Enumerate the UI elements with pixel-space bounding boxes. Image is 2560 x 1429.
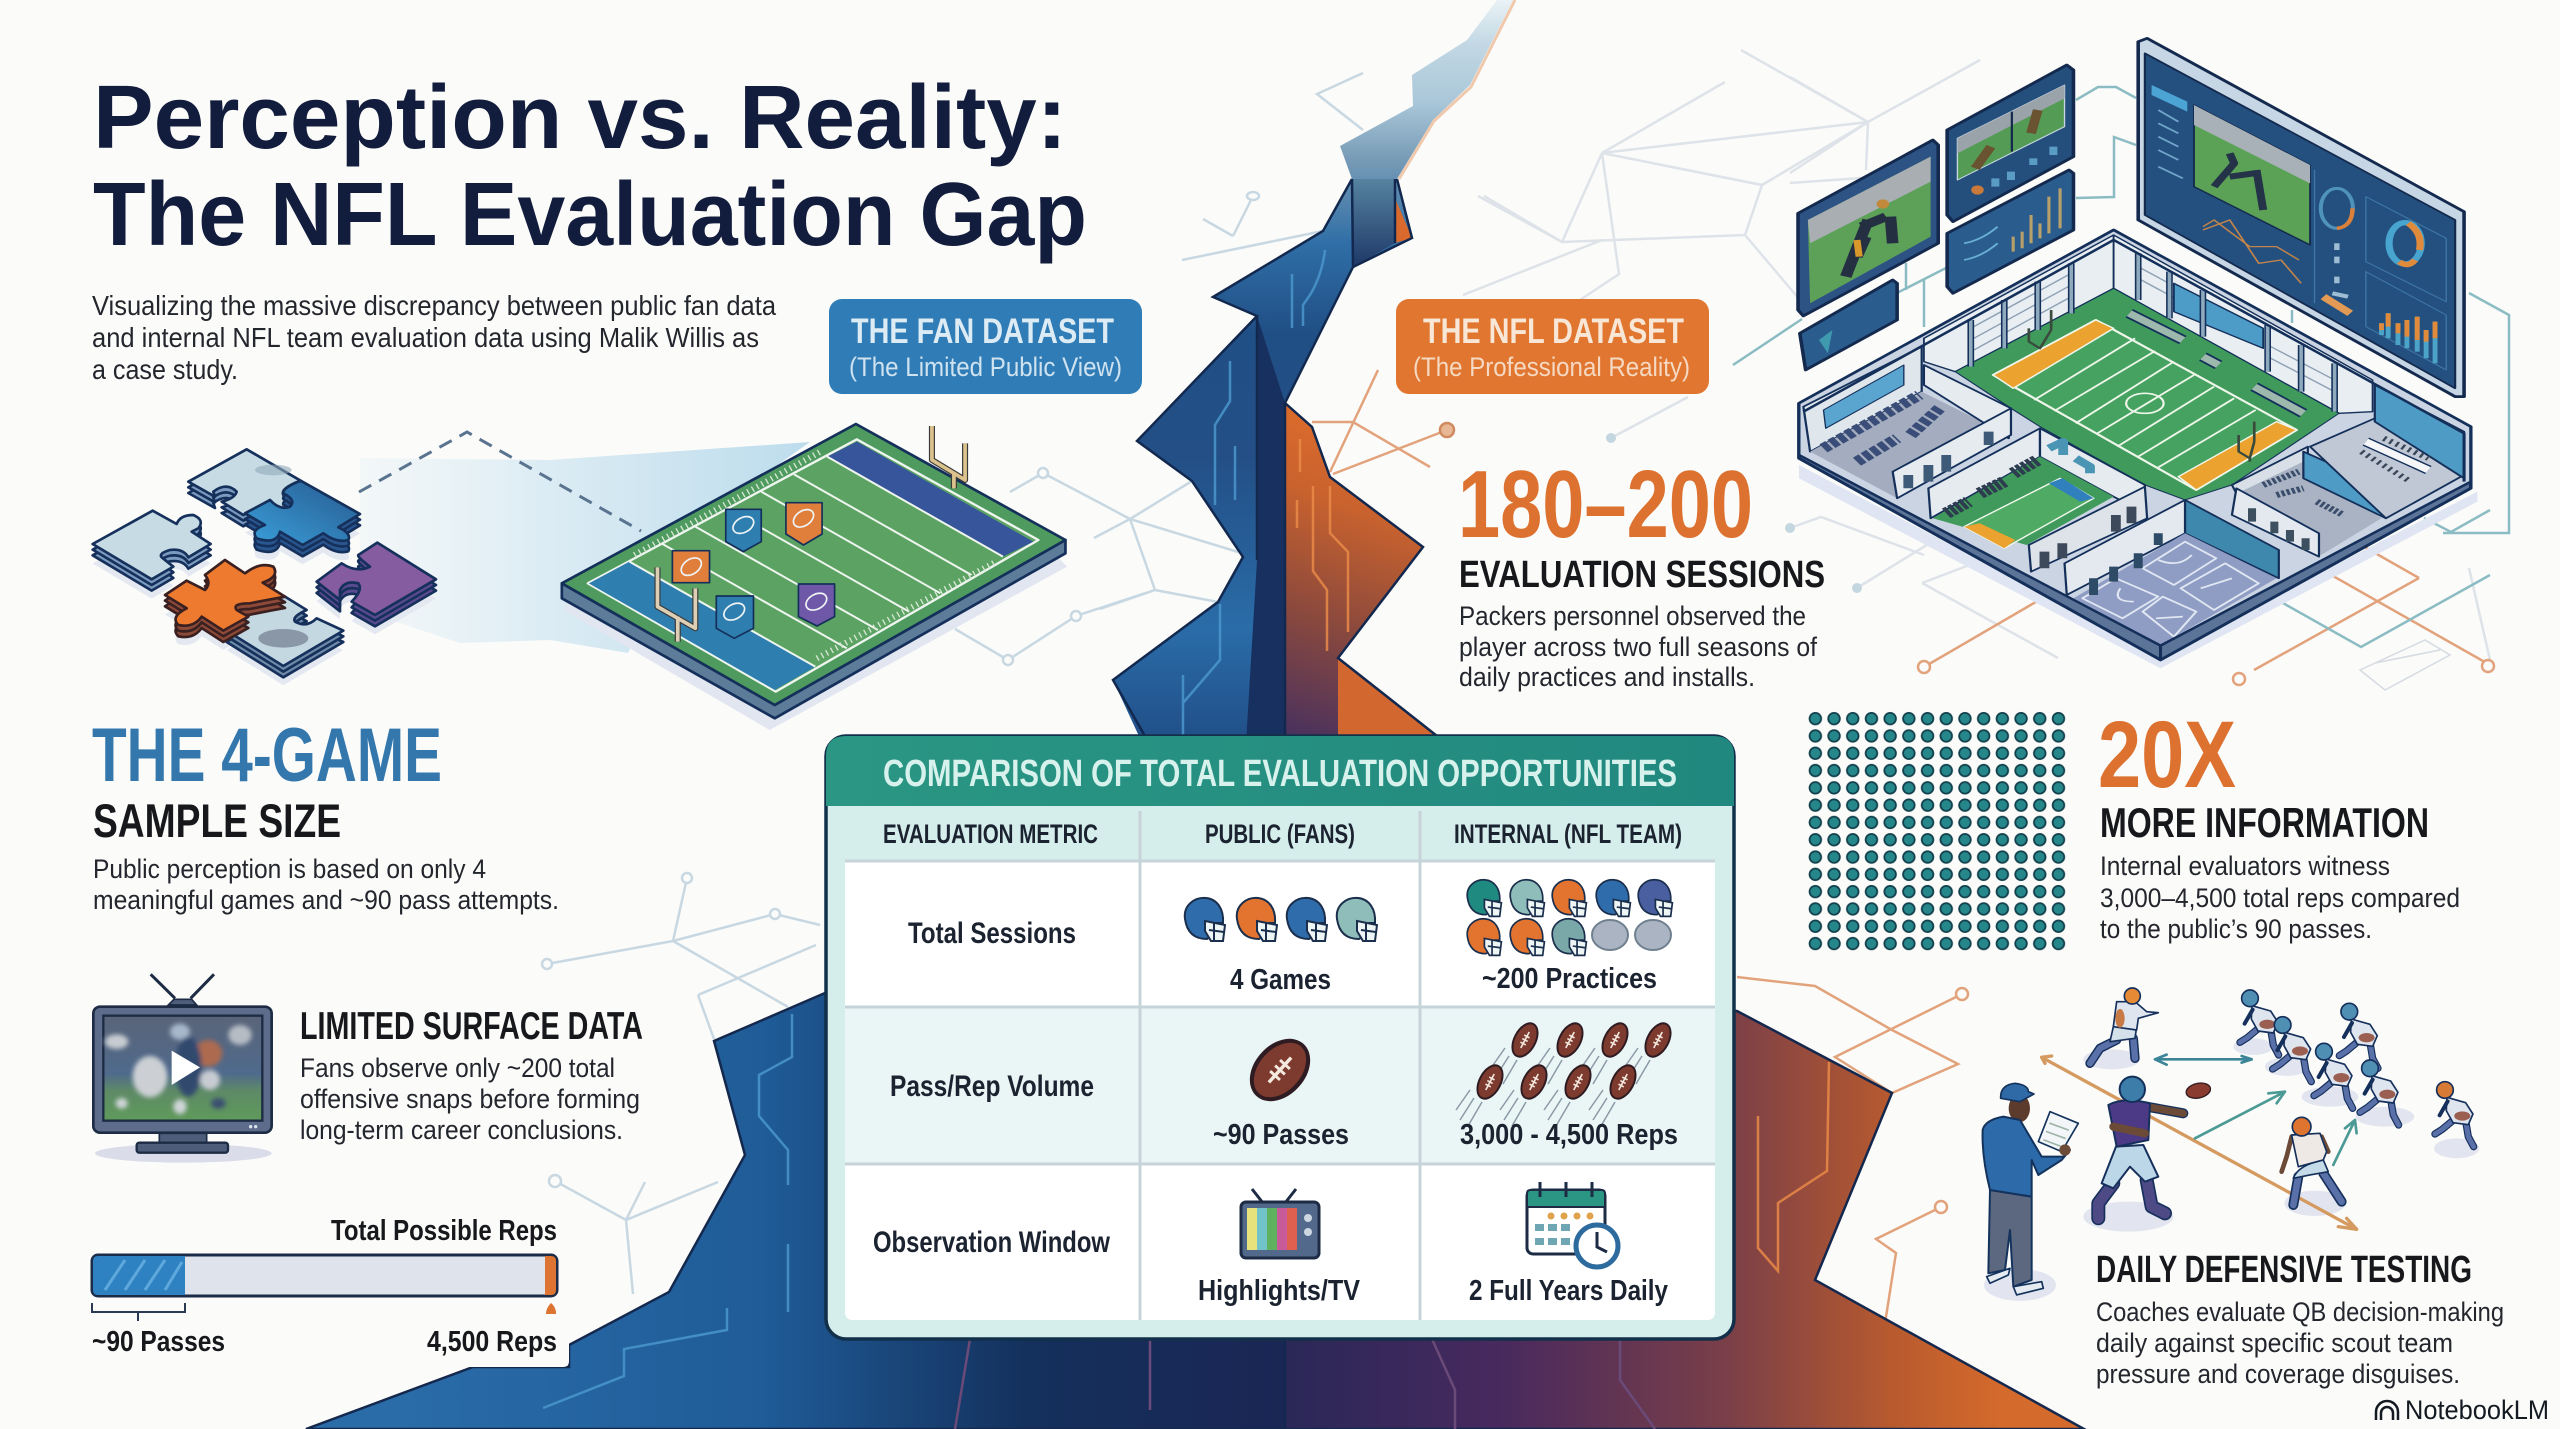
row label: observation window: Observation Window xyxy=(873,1226,1111,1259)
table column headers: INTERNAL (NFL TEAM) xyxy=(1454,819,1682,849)
marker: purple xyxy=(798,584,835,626)
fissure: orange professional side top xyxy=(1285,403,1460,780)
end zone: lower xyxy=(2178,422,2297,490)
wall screens xyxy=(2174,283,2263,348)
stat: 20x more information: 20X xyxy=(2098,702,2236,808)
end zone: navy xyxy=(827,442,1033,557)
subtitle: a case study. xyxy=(92,354,238,385)
fissure: pale orange top edge xyxy=(1399,0,1515,179)
screen: panels xyxy=(2315,170,2446,370)
screen: line chart xyxy=(2203,220,2301,283)
network lines: right grey, teal and orange xyxy=(1312,50,2509,1415)
football in flight xyxy=(2185,1081,2212,1100)
illustration: small field with markers xyxy=(562,424,1067,730)
text: limited surface data: long-term career conclusions. xyxy=(300,1115,623,1145)
stat: 180-200 evaluation sessions: daily practices and installs. xyxy=(1459,662,1755,692)
light beam from puzzle to field xyxy=(360,442,810,653)
text: limited surface data: Fans observe only ~200 total xyxy=(300,1053,615,1083)
icon: scattered puzzle pieces xyxy=(93,449,436,685)
midfield logo xyxy=(2126,393,2164,413)
badge: the fan dataset xyxy=(829,299,1142,394)
screen: button xyxy=(2323,297,2350,313)
player: far right xyxy=(2435,1082,2474,1147)
illustration: isometric facility cutaway xyxy=(1799,230,2477,668)
stat: 20x more information xyxy=(2098,702,2460,944)
arrow: teal routes xyxy=(2195,1092,2357,1165)
stat: 180-200 evaluation sessions: Packers personnel observed the xyxy=(1459,601,1806,631)
title: Perception vs. Reality: xyxy=(93,68,1067,168)
facility shadow xyxy=(1799,465,2477,668)
fissure: orange professional side bottom xyxy=(1285,1000,2084,1429)
icon: ten helmets xyxy=(1467,880,1672,955)
table body rows xyxy=(845,811,1715,1320)
table title bar xyxy=(826,736,1734,806)
cell: reps: 3,000 - 4,500 Reps xyxy=(1460,1119,1678,1151)
icon: four helmets xyxy=(1185,898,1377,941)
fissure: orange lower wedge xyxy=(1338,658,1437,745)
screen: large analytics xyxy=(2138,38,2464,397)
arrow: orange route xyxy=(2042,1056,2357,1229)
cell: 200 practices: ~200 Practices xyxy=(1482,963,1657,995)
player: defender group xyxy=(2240,990,2399,1125)
badge: the fan dataset: (The Limited Public View) xyxy=(849,352,1122,382)
stat: 20x more information: 3,000–4,500 total reps compared xyxy=(2100,883,2460,913)
back wall: left xyxy=(1924,235,2114,372)
text: limited surface data: LIMITED SURFACE DATA xyxy=(300,1005,643,1048)
fissure: dark outlines xyxy=(1113,179,1437,745)
illustration: practice scene xyxy=(1983,988,2479,1301)
icon: calendar with clock xyxy=(1527,1182,1618,1267)
icon: eight footballs xyxy=(1456,1019,1676,1126)
player: lower receiver xyxy=(2282,1117,2342,1205)
icon: single football xyxy=(1241,1030,1319,1110)
text: limited surface data xyxy=(300,1005,643,1145)
end zone: upper xyxy=(1993,320,2114,388)
facility slab xyxy=(1799,230,2471,660)
indoor turf xyxy=(1955,288,2339,500)
person: coach with clipboard xyxy=(1983,1083,2078,1295)
facility floor xyxy=(1799,230,2471,646)
text: daily defensive testing xyxy=(2096,1249,2504,1389)
subtitle: and internal NFL team evaluation data using Malik Willis as xyxy=(92,322,759,353)
badge: the nfl dataset xyxy=(1396,299,1709,394)
text: daily defensive testing: Coaches evaluate QB decision-making xyxy=(2096,1297,2504,1327)
puzzle piece: orange xyxy=(165,560,285,642)
row label: pass/rep volume: Pass/Rep Volume xyxy=(890,1070,1094,1103)
chart: total possible reps bar: 4,500 Reps xyxy=(427,1326,557,1358)
screen: sidebar list xyxy=(2158,110,2183,178)
stat: the 4-game sample size: SAMPLE SIZE xyxy=(93,794,341,847)
player: receiver xyxy=(2090,988,2158,1063)
puzzle piece: pale left xyxy=(93,511,211,591)
back wall: right xyxy=(2114,235,2373,413)
fissure: small orange chip xyxy=(1395,198,1412,243)
screen: players xyxy=(2214,153,2263,210)
chart: total possible reps bar: ~90 Passes xyxy=(92,1326,225,1358)
stat: the 4-game sample size: Public perception is based on only 4 xyxy=(93,854,486,884)
white tab behind 4,500 reps label xyxy=(420,1322,569,1367)
marker: blue top xyxy=(726,509,761,552)
piece shadow xyxy=(93,500,436,685)
fissure circuit traces xyxy=(543,250,1829,1429)
stat: the 4-game sample size: meaningful games and ~90 pass attempts. xyxy=(93,885,559,915)
stat: 180-200 evaluation sessions: 180–200 xyxy=(1458,451,1753,558)
row label: total sessions: Total Sessions xyxy=(908,917,1076,950)
wall columns xyxy=(1971,253,2335,412)
stat: the 4-game sample size: THE 4-GAME xyxy=(92,713,442,798)
title: The NFL Evaluation Gap xyxy=(93,165,1087,265)
screen: split game footage xyxy=(1947,65,2073,222)
table title bar: COMPARISON OF TOTAL EVALUATION OPPORTUNITIES xyxy=(883,753,1677,795)
wall rails xyxy=(1971,267,2335,392)
title xyxy=(93,68,1087,265)
chart: dot grid of reps xyxy=(1806,710,2068,952)
playing area xyxy=(588,439,1038,692)
fissure: blue fan side top xyxy=(1113,0,1513,760)
notebooklm mark: NotebookLM xyxy=(2405,1395,2549,1425)
text: daily defensive testing: daily against specific scout team xyxy=(2096,1328,2453,1358)
fissure: dark upper strip xyxy=(1352,179,1395,267)
marker: blue bottom xyxy=(716,596,753,638)
icon: color bar tv xyxy=(1241,1189,1319,1258)
room: practice field xyxy=(1928,428,2147,572)
room: meeting xyxy=(2310,385,2464,518)
goal posts xyxy=(2029,310,2254,462)
room: weight room xyxy=(1803,347,2011,498)
stat: 180-200 evaluation sessions: player across two full seasons of xyxy=(1459,632,1817,662)
fissure: dark central strip xyxy=(1245,316,1285,760)
stat: 180-200 evaluation sessions xyxy=(1458,451,1825,692)
field markings xyxy=(1993,320,2297,490)
table column headers: PUBLIC (FANS) xyxy=(1205,819,1355,849)
end zone: blue xyxy=(589,562,815,690)
badge: the nfl dataset: THE NFL DATASET xyxy=(1423,312,1684,351)
cell: 4 games: 4 Games xyxy=(1230,964,1331,996)
screen: sidebar xyxy=(2152,85,2187,112)
panel: comparison table xyxy=(826,736,1734,1339)
puzzle piece: blue xyxy=(245,481,360,556)
field surface xyxy=(562,424,1065,705)
field shadow xyxy=(564,557,1067,730)
stat: 20x more information: to the public’s 90 passes. xyxy=(2100,914,2372,944)
hash marks xyxy=(634,452,996,658)
marker: orange top xyxy=(786,503,822,545)
field yard lines xyxy=(2034,338,2256,467)
goal post: near xyxy=(657,567,695,642)
text: limited surface data: offensive snaps before forming xyxy=(300,1084,640,1114)
network lines: left blue xyxy=(542,73,1363,1294)
cell: 90 passes: ~90 Passes xyxy=(1213,1119,1349,1151)
screen: status list xyxy=(2332,243,2348,297)
chart: total possible reps bar xyxy=(92,1215,557,1358)
text: daily defensive testing: pressure and coverage disguises. xyxy=(2096,1359,2460,1389)
dashed connector xyxy=(359,432,641,531)
screen: donut chart xyxy=(2389,223,2421,264)
goal post: far xyxy=(932,426,965,488)
sideline benches xyxy=(2129,313,2303,413)
puzzle piece: purple xyxy=(317,543,436,626)
marker: orange left xyxy=(672,551,710,583)
screen: small ticker xyxy=(1800,280,1897,370)
field base xyxy=(562,540,1065,718)
stat: the 4-game sample size xyxy=(92,713,559,915)
subtitle xyxy=(92,290,776,385)
icon: blurred tv with play button xyxy=(93,974,272,1163)
illustration: floating screens xyxy=(1798,38,2464,397)
screen: game footage left xyxy=(1798,140,1938,316)
puzzle piece: pale bottom xyxy=(227,597,343,677)
player shadows xyxy=(1984,1038,2479,1301)
player: quarterback xyxy=(2098,1077,2183,1218)
table column headers: EVALUATION METRIC xyxy=(883,819,1098,849)
arrow: teal double xyxy=(2155,1055,2252,1065)
subtitle: Visualizing the massive discrepancy between public fan data xyxy=(92,290,776,321)
yard lines xyxy=(629,457,1003,667)
badge: the fan dataset: THE FAN DATASET xyxy=(851,312,1114,351)
facility outer edge xyxy=(1799,230,2471,660)
cell: 2 full years daily: 2 Full Years Daily xyxy=(1469,1275,1668,1307)
stat: 180-200 evaluation sessions: EVALUATION SESSIONS xyxy=(1459,554,1825,596)
cell: highlights/tv: Highlights/TV xyxy=(1198,1275,1361,1307)
fissure: blue fan side bottom xyxy=(306,950,1290,1429)
screen: bar chart xyxy=(1947,170,2073,293)
screen: bar chart xyxy=(2381,313,2435,363)
screen: game video xyxy=(2194,105,2310,245)
screen: crowd strip xyxy=(2194,105,2310,183)
stat: 20x more information: Internal evaluators witness xyxy=(2100,851,2390,881)
room: office xyxy=(2232,447,2386,557)
table column headers xyxy=(883,819,1682,849)
badge: the nfl dataset: (The Professional Reality) xyxy=(1413,352,1690,382)
puzzle piece: pale top xyxy=(188,449,301,526)
screen: gauge xyxy=(2321,188,2353,228)
stat: 20x more information: MORE INFORMATION xyxy=(2100,799,2429,846)
chart: total possible reps bar: Total Possible Reps xyxy=(331,1215,557,1247)
room: film whiteboard xyxy=(2065,500,2279,645)
